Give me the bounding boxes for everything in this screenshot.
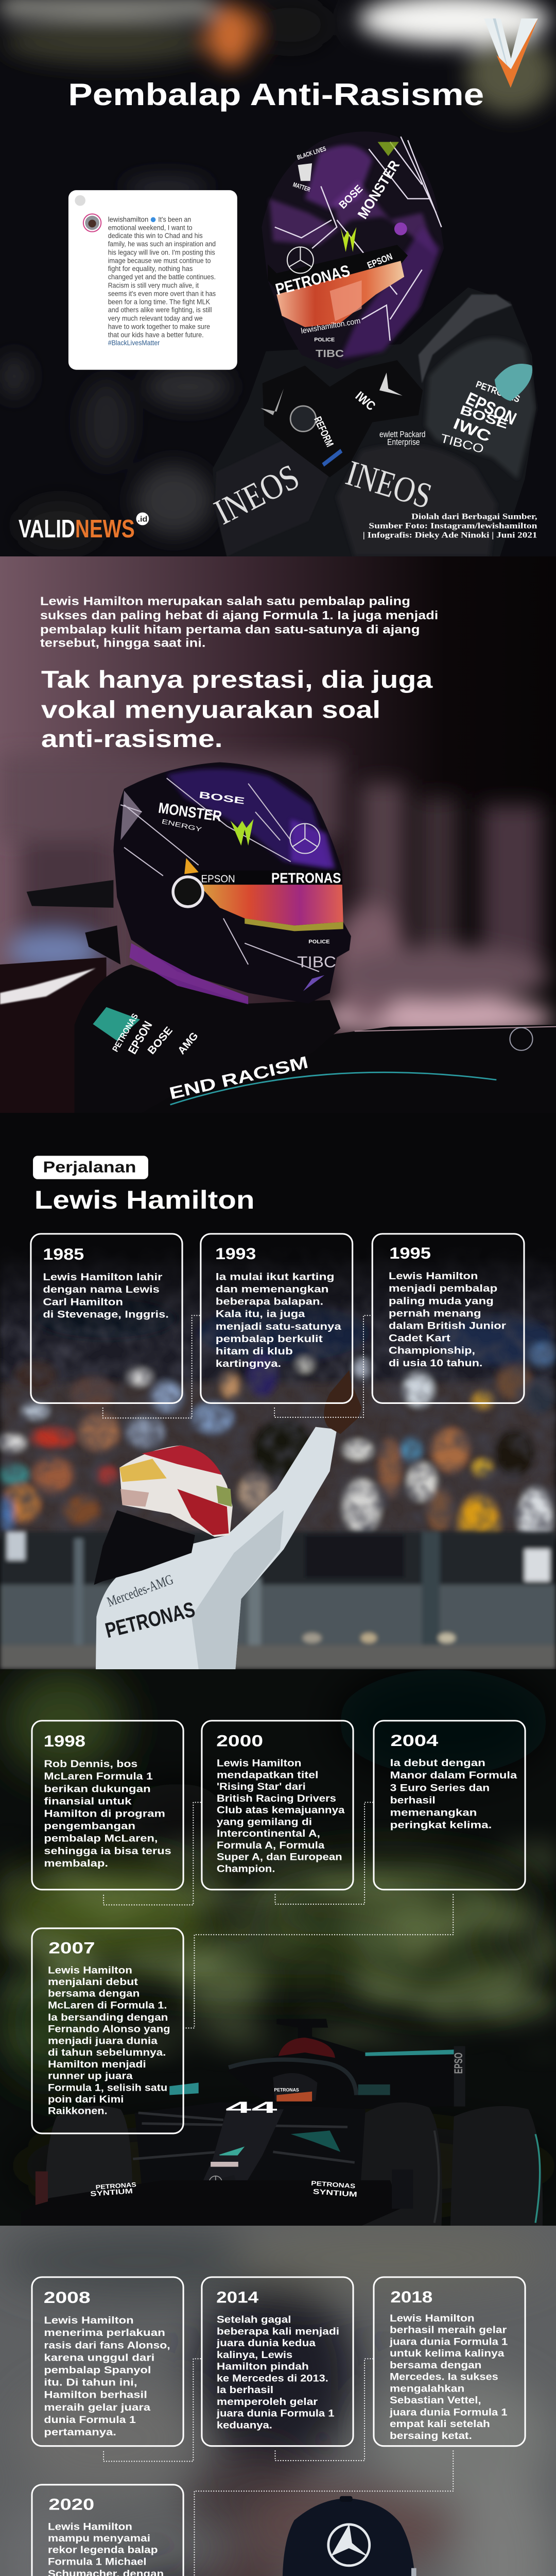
- caption text: image because we must continue to: [108, 257, 211, 264]
- text: 2020: rekor legenda balap: [48, 2545, 158, 2556]
- connector: 2018 to 2020: [183, 2451, 453, 2576]
- text: 2008: dunia Formula 1: [44, 2414, 136, 2426]
- text: 2004: berhasil: [390, 1794, 436, 1806]
- text: 1998: berikan dukungan: [44, 1783, 151, 1794]
- suit sponsor labels: INEOS: [208, 456, 305, 533]
- blurred background: [0, 2226, 553, 2576]
- card: 1995: [372, 1234, 524, 1403]
- text: 2000: Super A, dan European: [217, 1852, 342, 1863]
- text: 2000: Lewis Hamilton: [217, 1758, 301, 1769]
- text: 1998: [44, 1758, 171, 1869]
- text: 1995: Cadet Kart: [389, 1333, 450, 1344]
- tree texture: [0, 1818, 556, 2074]
- text: 2000: 'Rising Star' dari: [217, 1781, 306, 1792]
- card: 2004: [374, 1721, 525, 1890]
- text: 2007: McLaren di Formula 1.: [48, 1999, 167, 2011]
- helmet: PETRONAS: [271, 870, 341, 886]
- card: 2008: 2008: [44, 2288, 91, 2307]
- Formula 1 car: PETRONAS: [311, 2180, 356, 2190]
- intro headline: vokal menyuarakan soal: [41, 696, 380, 723]
- Mercedes star on helmet: [287, 247, 314, 273]
- racing suit: Enterprise: [387, 437, 420, 447]
- caption text: been for a long time. The fight MLK: [108, 298, 210, 306]
- text: 2014: beberapa kali menjadi: [217, 2326, 339, 2337]
- card: 1993: [201, 1234, 353, 1403]
- card: 2008: [32, 2277, 183, 2446]
- card: 2007: [32, 1928, 183, 2133]
- text: 1995: menjadi pembalap: [389, 1283, 497, 1294]
- Formula 1 car: 44: [225, 2098, 278, 2116]
- text: 1993: [216, 1271, 342, 1369]
- Formula 1 car: PETRONAS: [95, 2181, 136, 2191]
- text: 1985: di Stevenage, Inggris.: [43, 1309, 169, 1320]
- text: 2007: Ia bersanding dengan: [48, 2012, 168, 2023]
- card: 2020: 2020: [48, 2495, 94, 2514]
- wheels: [45, 2106, 132, 2226]
- racing suit: EPSON: [463, 389, 519, 429]
- text: 2014: Setelah gagal: [217, 2314, 291, 2326]
- text: 1998: Hamilton di program: [44, 1808, 165, 1820]
- text: 2000: British Racing Drivers: [217, 1793, 336, 1804]
- cap: [283, 2498, 415, 2576]
- text: 1985: [43, 1272, 169, 1320]
- text: 1998: membalap.: [44, 1858, 108, 1869]
- car body and suit: AMG: [176, 1030, 201, 1057]
- text: 2000: [217, 1758, 345, 1874]
- connector: 2000 to 2004: [275, 1802, 374, 1904]
- caption text: his legacy will live on. I'm posting this: [108, 249, 215, 257]
- helmet: ENERGY: [161, 818, 202, 833]
- text: 1998: pembalap McLaren,: [44, 1833, 158, 1844]
- text: 2008: pertamanya.: [44, 2427, 116, 2438]
- racing suit: INEOS: [341, 453, 437, 517]
- text: 1995: dalam British Junior: [389, 1320, 506, 1331]
- car body and suit: EPSON: [126, 1019, 155, 1056]
- text: 2020: mampu menyamai: [48, 2533, 150, 2544]
- card: 2014: 2014: [216, 2287, 259, 2306]
- racing suit: BOSE: [337, 183, 365, 211]
- text: 2004: [390, 1757, 518, 1831]
- fade to black at top: [0, 1113, 556, 1333]
- text: 2020: Formula 1 Michael: [48, 2556, 146, 2567]
- racing suit: TIBCO: [439, 431, 485, 456]
- caption text: Racism is still very much alive, it: [108, 282, 199, 290]
- caption text: and others alike were fighting, is still: [108, 306, 212, 314]
- source credits: Diolah dari Berbagai Sumber,: [411, 513, 537, 521]
- card: 1995: 1995: [389, 1244, 431, 1262]
- caption text: [108, 215, 216, 347]
- text: 1998: McLaren Formula 1: [44, 1771, 153, 1782]
- racing suit: [208, 131, 536, 556]
- text: 2007: menjalani debut: [48, 1976, 138, 1988]
- intro paragraph: Lewis Hamilton merupakan salah satu pembalap paling: [40, 594, 410, 607]
- text: 2008: karena unggul dari: [44, 2352, 154, 2363]
- text: 2004: 3 Euro Series dan: [390, 1782, 490, 1793]
- text: 2007: runner up juara: [48, 2071, 133, 2082]
- text: 2018: mengalahkan: [390, 2383, 464, 2394]
- Formula 1 car: [21, 2019, 543, 2226]
- connector: 2014 to 2018: [275, 2359, 374, 2461]
- text: 2018: juara dunia Formula 1: [389, 2406, 508, 2418]
- racing suit: MATTER: [292, 181, 311, 193]
- Formula 1 car: SYNTIUM: [90, 2187, 133, 2198]
- text: 2018: Lewis Hamilton: [390, 2313, 475, 2324]
- intro paragraph: [40, 594, 438, 650]
- card: 1985: [31, 1234, 182, 1403]
- caption text: dedicate this win to Chad and his: [108, 232, 203, 240]
- helmet: [262, 131, 444, 369]
- text: 1985: Carl Hamilton: [43, 1296, 123, 1308]
- profile avatar: [83, 214, 101, 232]
- source credits: [363, 513, 537, 539]
- helmet: TIBC: [297, 954, 336, 971]
- driver waving: PETRONAS: [103, 1597, 197, 1642]
- text: 2000: Formula A, Formula: [217, 1840, 325, 1851]
- driver waving: [94, 1370, 362, 1669]
- car body and suit: [0, 880, 556, 1113]
- card: 2018: 2018: [390, 2287, 432, 2306]
- helmet: [113, 762, 351, 1004]
- gloves: [263, 360, 423, 477]
- text: 1995: pernah menang: [389, 1308, 481, 1319]
- intro headline: [41, 666, 433, 752]
- crowd texture: [0, 1241, 556, 1539]
- text: 2008: meraih gelar juara: [44, 2402, 151, 2413]
- text: 2018: juara dunia Formula 1: [389, 2336, 508, 2347]
- connector: 1998 to 2000: [103, 1802, 202, 1905]
- intro paragraph: tersebut, hingga saat ini.: [40, 636, 205, 650]
- Instagram caption card: [68, 190, 237, 370]
- text: 1998: Rob Dennis, bos: [44, 1758, 137, 1770]
- intro headline: anti-rasisme.: [41, 725, 223, 752]
- Formula 1 car: EPSO: [452, 2053, 465, 2074]
- text: 1995: Lewis Hamilton: [389, 1270, 478, 1282]
- helmet: MONSTER: [158, 800, 223, 825]
- card: 1993: 1993: [215, 1244, 256, 1263]
- driver waving: Mercedes-AMG: [105, 1571, 175, 1609]
- panel: timeline 2008-2020: [0, 2226, 556, 2576]
- panel: timeline 1998-2007: [0, 1669, 556, 2226]
- text: 2014: juara dunia kedua: [216, 2337, 316, 2349]
- text: 2018: bersaing ketat.: [390, 2430, 472, 2442]
- text: 1993: hitam di klub: [216, 1346, 293, 1357]
- text: 1993: dan memenangkan: [216, 1284, 328, 1295]
- logo: Validnews.id: .id: [137, 515, 148, 524]
- heading tag: [33, 1156, 148, 1179]
- blurred photo background: [0, 0, 555, 550]
- text: 2008: menerima perlakuan: [44, 2327, 165, 2338]
- caption text: have to work together to make sure: [108, 323, 210, 330]
- text: 1985: Lewis Hamilton lahir: [43, 1272, 163, 1283]
- text: 2007: [48, 1964, 170, 2117]
- caption text: seems it's even more overt than it has: [108, 290, 216, 297]
- racing suit: POLICE: [314, 337, 335, 343]
- text: 2000: Intercontinental A,: [217, 1828, 320, 1839]
- text: 2014: Hamilton pindah: [217, 2361, 309, 2372]
- blurred pit background: [0, 755, 553, 1037]
- text: 2004: peringkat kelima.: [390, 1820, 492, 1831]
- caption text: very much relevant today and we: [108, 315, 203, 323]
- text: 2007: Lewis Hamilton: [48, 1964, 132, 1976]
- text: 1993: Kala itu, ia juga: [216, 1309, 306, 1320]
- card: 2014: [202, 2277, 353, 2446]
- text: 2018: bersama dengan: [390, 2360, 481, 2371]
- connector: 1985 to 1993: [103, 1315, 201, 1418]
- text: 2008: pembalap Spanyol: [44, 2365, 151, 2376]
- caption text: that our kids have a better future.: [108, 331, 204, 338]
- helmet: EPSON: [201, 873, 235, 885]
- racing suit: PETRONAS: [475, 379, 522, 404]
- text: 2007: menjadi juara dunia: [48, 2035, 158, 2046]
- racing suit: IWC: [451, 415, 493, 446]
- text: 1995: paling muda yang: [389, 1295, 494, 1307]
- card: 2000: [202, 1721, 353, 1890]
- intro paragraph: sukses dan paling hebat di ajang Formula 1. Ia juga menjadi: [40, 608, 438, 622]
- text: 2007: Formula 1, selisih satu: [48, 2082, 167, 2093]
- caption text: family, he was such an inspiration and: [108, 240, 216, 248]
- source credits: Sumber Foto: Instagram/lewishamilton: [369, 522, 537, 531]
- text: 2014: memperoleh gelar: [217, 2396, 318, 2408]
- text: 2014: [216, 2314, 339, 2431]
- source credits: | Infografis: Dieky Ade Ninoki | Juni 2021: [363, 531, 537, 539]
- helmet: POLICE: [308, 939, 330, 945]
- text: 1993: beberapa balapan.: [216, 1296, 323, 1308]
- text: 2000: Club atas kemajuannya: [217, 1805, 345, 1816]
- caption text: fight for equality, nothing has: [108, 265, 193, 273]
- panel: intro: [0, 556, 556, 1113]
- panel: hero: [0, 0, 556, 556]
- title: Pembalap Anti-Rasisme: [68, 77, 484, 112]
- caption text: emotional weekend, I want to: [108, 224, 193, 231]
- front wing: [21, 2180, 401, 2226]
- text: 2014: juara dunia Formula 1: [216, 2408, 335, 2419]
- intro headline: Tak hanya prestasi, dia juga: [41, 666, 433, 693]
- text: 2018: empat kali setelah: [390, 2418, 490, 2430]
- card: 2007: 2007: [48, 1939, 95, 1957]
- text: 1995: di usia 10 tahun.: [389, 1358, 482, 1369]
- text: 2014: keduanya.: [217, 2419, 272, 2431]
- text: 2018: Mercedes. Ia sukses: [390, 2371, 498, 2383]
- text: 2008: Lewis Hamilton: [44, 2315, 134, 2326]
- card: 1998: [32, 1721, 183, 1890]
- text: 2000: Champion.: [217, 1863, 275, 1874]
- caption text: #BlackLivesMatter: [108, 339, 160, 347]
- card: 2000: 2000: [216, 1731, 263, 1750]
- Hamilton in cap: [167, 2496, 544, 2576]
- text: 2018: Sebastian Vettel,: [390, 2395, 481, 2406]
- logo: V mark: [484, 19, 538, 88]
- caption text: It's been an: [158, 215, 191, 223]
- text: 2008: rasis dari fans Alonso,: [44, 2340, 170, 2351]
- connector: 2008 to 2014: [103, 2359, 202, 2461]
- text: 2004: memenangkan: [390, 1807, 477, 1818]
- text: 2000: yang gemilang di: [217, 1816, 312, 1827]
- card: 2004: 2004: [390, 1731, 439, 1750]
- text: 1993: pembalap berkulit: [216, 1333, 323, 1345]
- logo: Validnews.id: VALIDNEWS: [19, 514, 135, 543]
- text: 1993: Ia mulai ikut karting: [216, 1271, 335, 1282]
- text: 2018: berhasil meraih gelar: [390, 2325, 507, 2336]
- text: 2007: poin dari Kimi: [48, 2094, 124, 2105]
- racing suit: MONSTER: [354, 158, 403, 222]
- panel: timeline 1985-1995: [0, 1113, 556, 1669]
- text: 1998: sehingga ia bisa terus: [44, 1845, 171, 1857]
- text: 2014: Ia berhasil: [217, 2384, 273, 2396]
- text: 1993: menjadi satu-satunya: [216, 1321, 342, 1332]
- text: 1995: Championship,: [389, 1345, 475, 1357]
- text: 1985: dengan nama Lewis: [43, 1284, 160, 1295]
- intro paragraph: pembalap kulit hitam pertama dan satu-satunya di ajang: [40, 622, 420, 636]
- text: 2018: [389, 2313, 508, 2442]
- caption text: lewishamilton: [108, 215, 148, 223]
- Mercedes star on cap: [328, 2524, 370, 2566]
- racing suit: TIBC: [316, 348, 344, 360]
- text: 2014: ke Mercedes di 2013.: [217, 2372, 328, 2384]
- text: 1995: [389, 1270, 506, 1369]
- racing suit: IWC: [353, 389, 378, 414]
- blurred trees background: [0, 1669, 553, 2212]
- racing suit: BLACK LIVES: [296, 145, 327, 161]
- text: 2000: mendapatkan titel: [217, 1769, 319, 1781]
- heading tag: Perjalanan: [43, 1159, 136, 1176]
- text: 2007: Fernando Alonso yang: [48, 2024, 170, 2035]
- heading: Lewis Hamilton: [34, 1185, 255, 1214]
- racing suit: BOSE: [458, 403, 510, 432]
- text: 1993: kartingnya.: [216, 1358, 281, 1369]
- visor band: [268, 245, 408, 295]
- text: 2004: Ia debut dengan: [390, 1757, 485, 1769]
- racing suit: EPSON: [366, 251, 394, 270]
- text: 2007: Raikkonen.: [48, 2106, 108, 2117]
- car body and suit: BOSE: [145, 1025, 175, 1057]
- helmet: BOSE: [198, 790, 246, 806]
- card: 2018: [374, 2277, 525, 2446]
- text: 2007: Hamilton menjadi: [48, 2059, 146, 2070]
- text: 2018: untuk kelima kalinya: [390, 2348, 505, 2359]
- racing suit: PETRONAS: [273, 261, 352, 299]
- Formula 1 car: PETRONAS: [274, 2088, 299, 2093]
- text: 2007: di tahun sebelumnya.: [48, 2047, 166, 2058]
- racing suit: ewlett Packard: [379, 430, 426, 439]
- fence and track: [0, 1532, 556, 1669]
- Formula 1 car: SYNTIUM: [312, 2188, 357, 2198]
- racing suit: lewishamilton.com: [300, 316, 361, 335]
- text: 2008: itu. Di tahun ini,: [44, 2377, 137, 2388]
- card: 2020: [32, 2485, 183, 2576]
- caption text: changed yet and the battle continues.: [108, 273, 216, 281]
- text: 1998: finansial untuk: [44, 1795, 132, 1807]
- card: 1985: 1985: [43, 1245, 84, 1263]
- racing suit: REFORM: [311, 415, 336, 449]
- connector: 1993 to 1995: [274, 1315, 372, 1417]
- text: 2007: bersama dengan: [48, 1988, 140, 1999]
- card: 1998: 1998: [44, 1732, 85, 1750]
- text: 2020: [48, 2521, 164, 2576]
- car body and suit: END RACISM: [167, 1053, 310, 1104]
- text: 2008: [44, 2315, 170, 2438]
- text: 2020: Lewis Hamilton: [48, 2521, 132, 2532]
- text: 2008: Hamilton berhasil: [44, 2389, 147, 2401]
- text: 2004: Manor dalam Formula: [390, 1770, 518, 1781]
- car body and suit: PETRONAS: [110, 1012, 140, 1054]
- text: 2014: kalinya, Lewis: [217, 2349, 292, 2361]
- connector: 2004 to 2007: [183, 1894, 453, 2028]
- text: 1998: pengembangan: [44, 1821, 135, 1832]
- blurred crowd background: [0, 1262, 556, 1553]
